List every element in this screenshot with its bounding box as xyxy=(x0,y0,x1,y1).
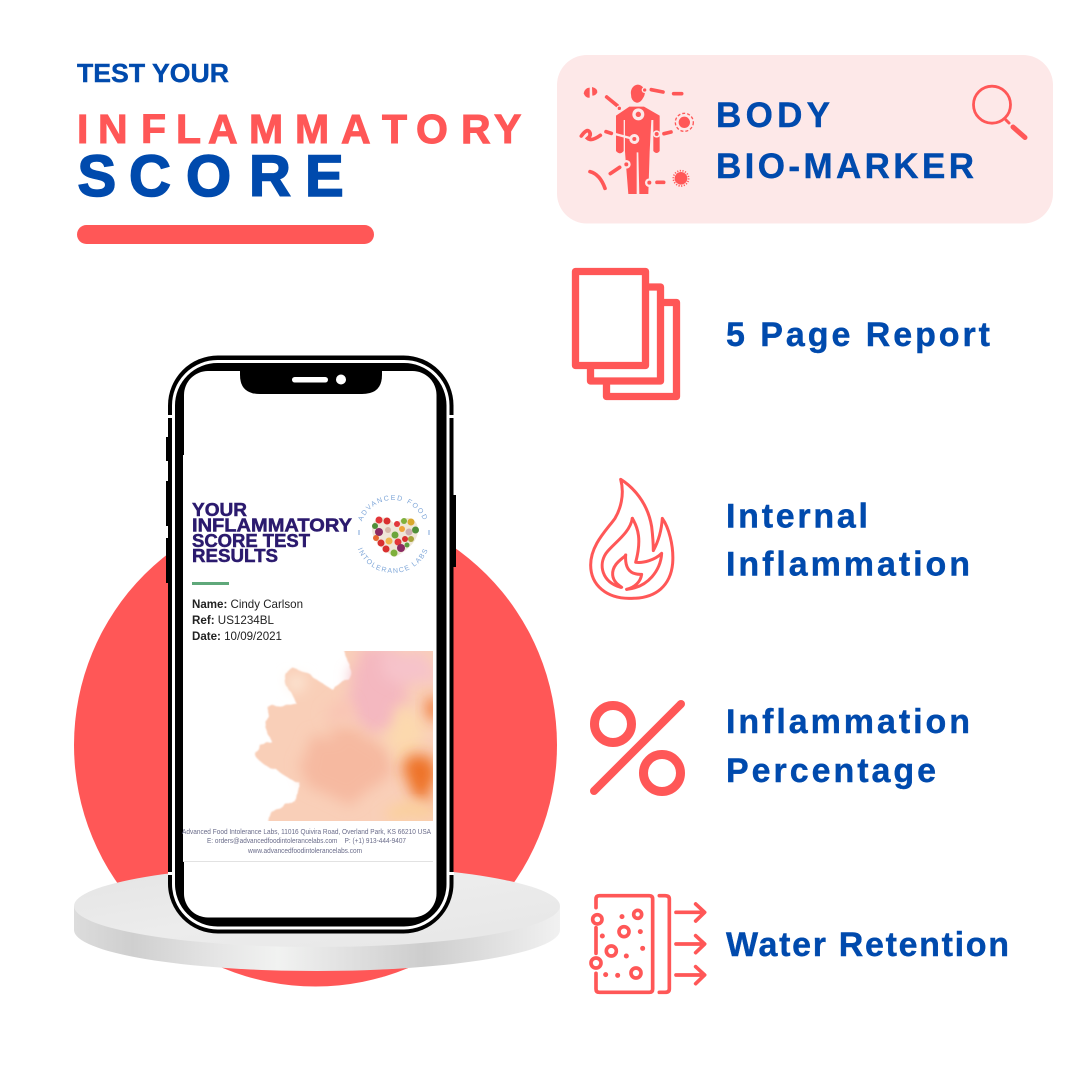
icon: magnifier xyxy=(974,86,1025,138)
coral background circle xyxy=(74,504,557,986)
logo: food heart xyxy=(358,495,430,574)
phone screen xyxy=(184,371,436,918)
icon: flame xyxy=(591,479,673,598)
label: 5 Page Report xyxy=(726,316,990,354)
feature: water retention xyxy=(591,896,1009,992)
heading: inflammatory: INFLAMMATORY xyxy=(77,106,521,152)
pedestal xyxy=(74,865,560,971)
patient details: Ref: US1234BL xyxy=(192,613,274,627)
heading: test your: TEST YOUR xyxy=(77,58,229,88)
panel: body bio-marker xyxy=(557,55,1053,224)
feature: internal inflammation: Inflammation xyxy=(726,546,970,584)
title block xyxy=(77,58,521,244)
report footer text xyxy=(182,829,431,855)
icon: water cell xyxy=(591,896,705,992)
heading: score: SCORE xyxy=(78,144,344,209)
phone body xyxy=(168,356,454,934)
feature: inflammation percentage: Percentage xyxy=(726,752,936,790)
logo: food heart: ADVANCED FOOD xyxy=(358,495,427,522)
side buttons xyxy=(166,437,456,583)
report heading: RESULTS xyxy=(192,546,278,566)
heading: body: BODY xyxy=(716,96,830,135)
report heading xyxy=(192,500,352,566)
report heading: SCORE TEST xyxy=(192,531,310,551)
feature: inflammation percentage xyxy=(594,703,970,792)
label: Inflammation xyxy=(726,703,970,741)
icon: percent xyxy=(594,704,681,792)
patient details: Date: 10/09/2021 xyxy=(192,629,282,643)
label: Water Retention xyxy=(726,926,1009,964)
notch xyxy=(240,371,382,394)
heading: bio-marker: BIO-MARKER xyxy=(716,147,974,186)
title underline bar xyxy=(77,225,374,244)
green divider xyxy=(192,582,229,585)
report smoke image xyxy=(254,651,433,821)
report heading: INFLAMMATORY xyxy=(192,516,352,536)
icon: pages xyxy=(576,272,676,396)
report footer text: E: orders@advancedfoodintolerancelabs.com P: (+1) 913-444-9407 xyxy=(207,838,406,845)
report heading: YOUR xyxy=(192,500,247,520)
speaker xyxy=(292,377,328,382)
logo: food heart: INTOLERANCE LABS xyxy=(358,548,428,574)
report footer text: Advanced Food Intolerance Labs, 11016 Quivira Road, Overland Park, KS 66210 USA xyxy=(182,829,431,836)
camera xyxy=(336,374,346,384)
label: Internal xyxy=(726,497,868,535)
feature: internal inflammation xyxy=(591,479,970,598)
feature: 5 page report xyxy=(576,272,990,396)
report footer text: www.advancedfoodintolerancelabs.com xyxy=(247,848,362,855)
patient details xyxy=(192,597,303,643)
phone mockup xyxy=(166,356,456,934)
icon: body with markers xyxy=(581,85,693,194)
report bottom rule xyxy=(183,861,433,862)
patient details: Name: Cindy Carlson xyxy=(192,597,303,611)
